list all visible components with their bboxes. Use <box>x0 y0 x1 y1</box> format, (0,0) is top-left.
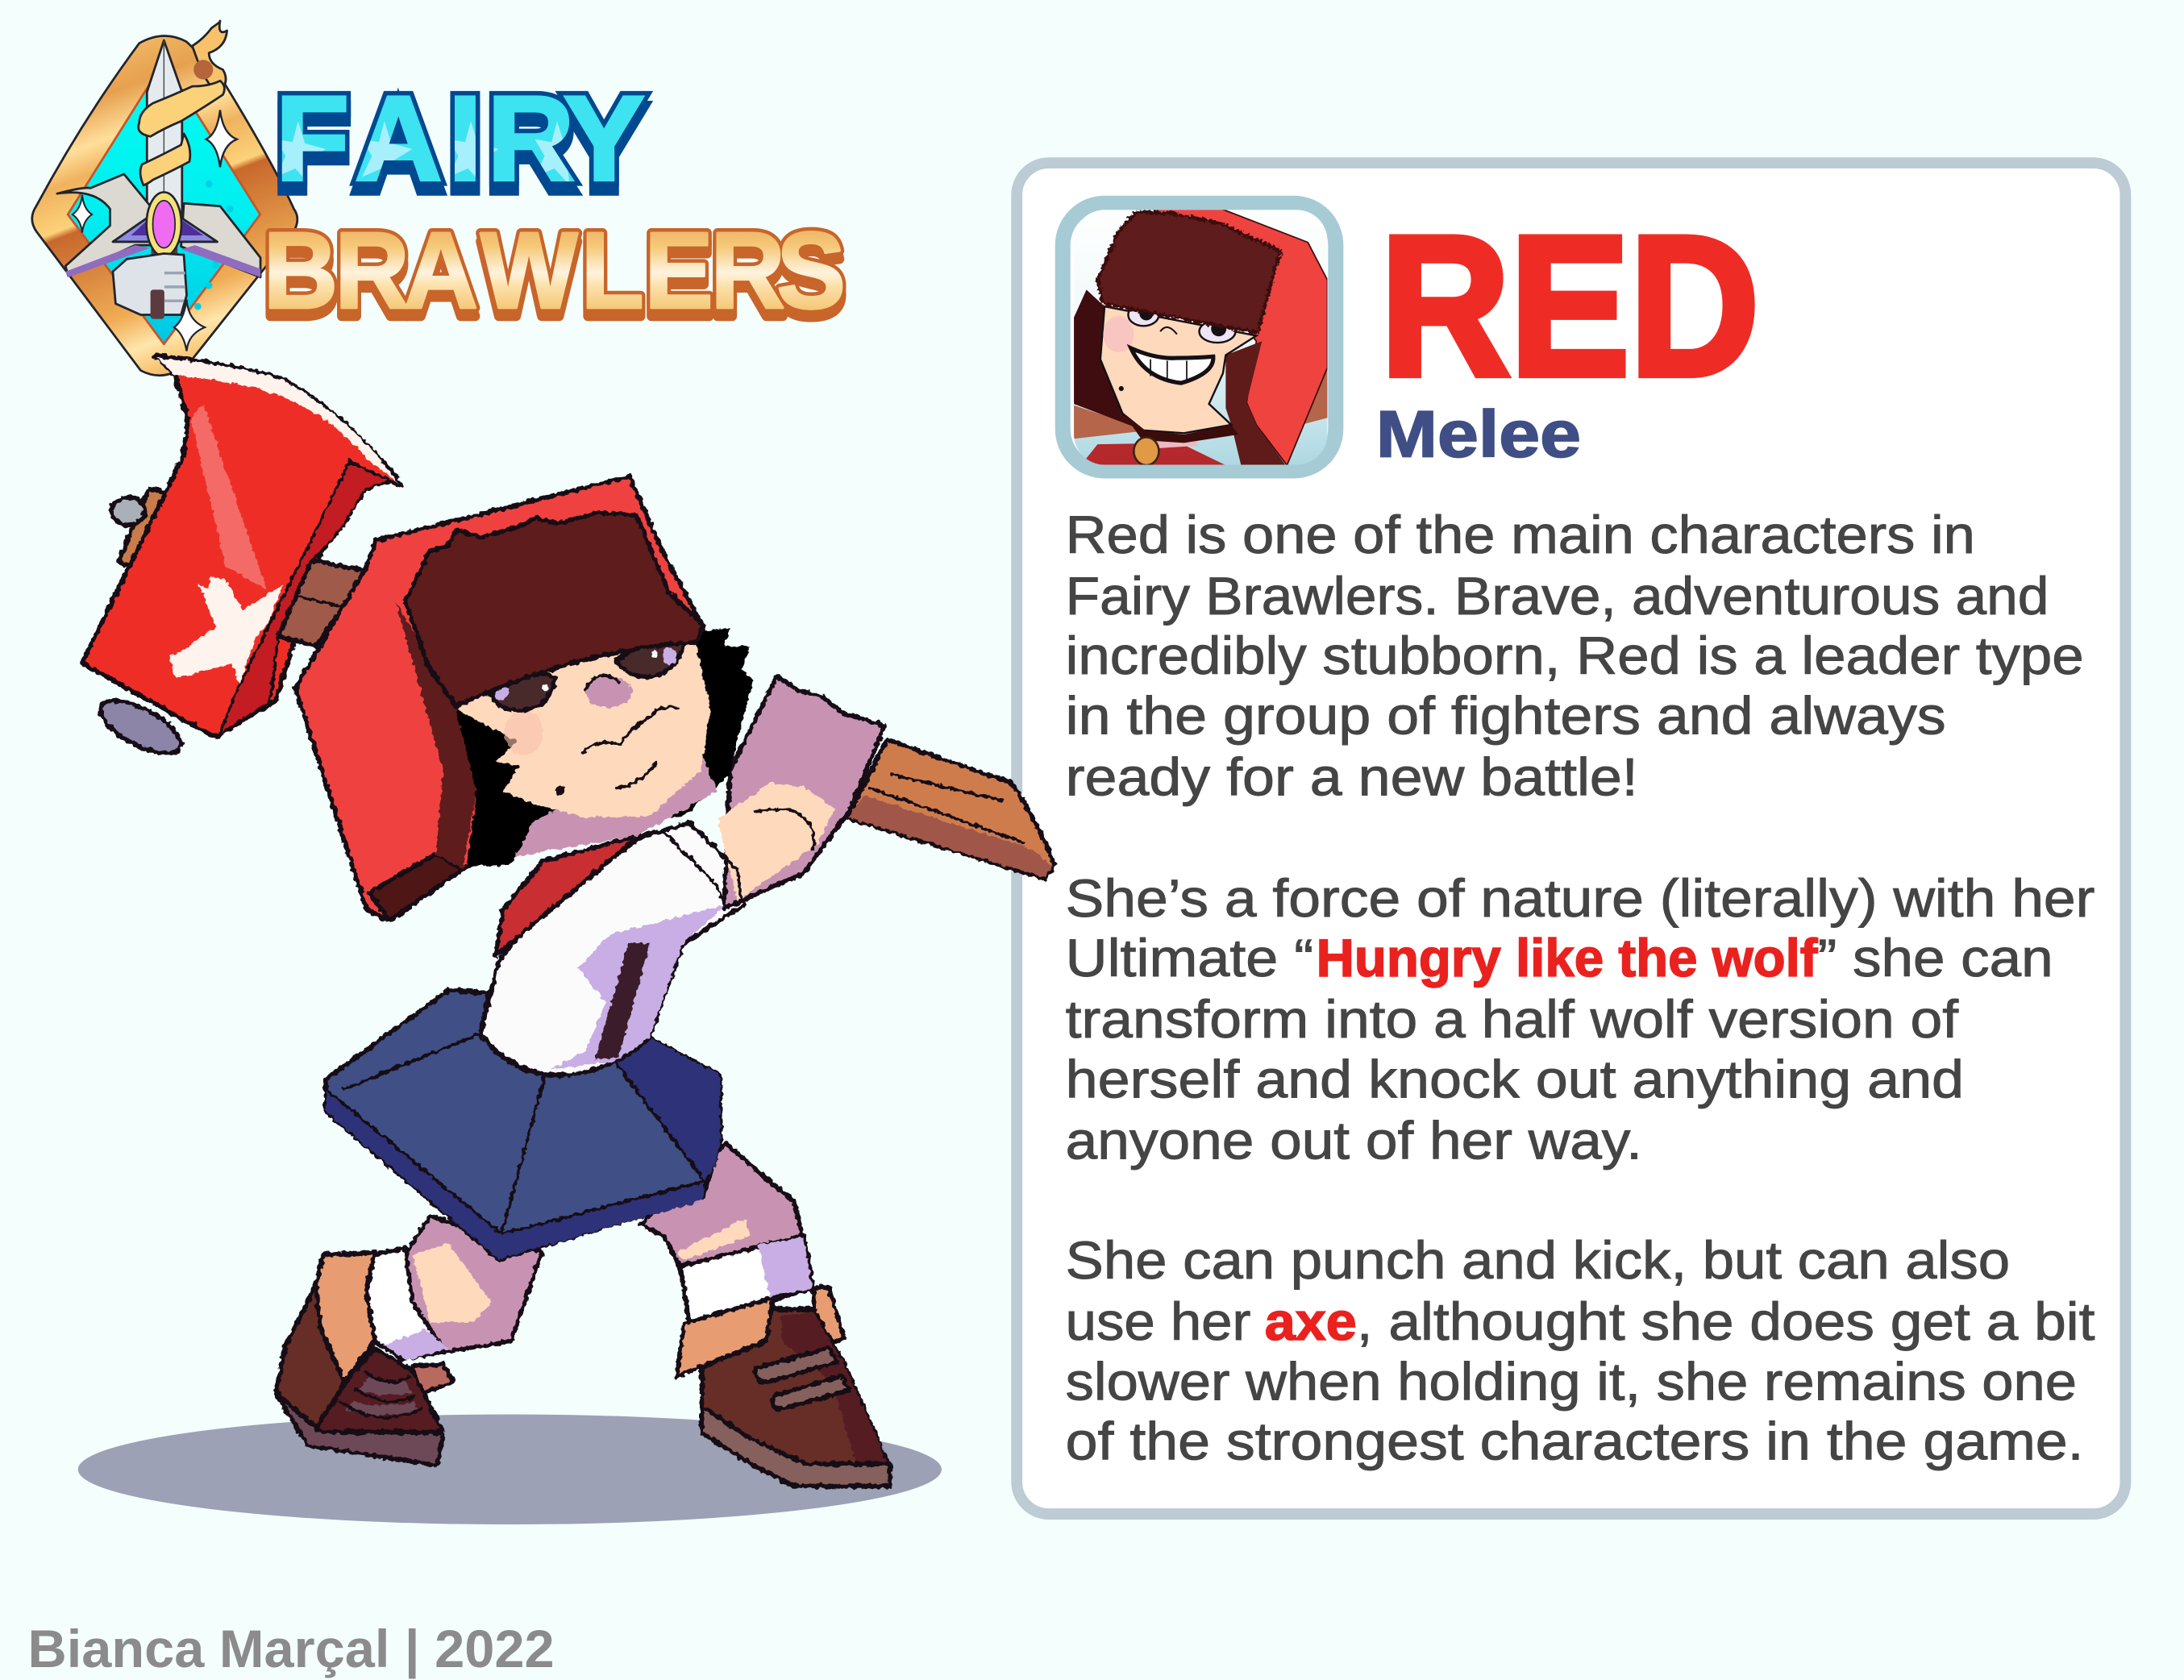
logo word: FAIRY: FAIRY <box>276 81 644 215</box>
face <box>456 634 710 817</box>
logo word: BRAWLERS: BRAWLERS <box>264 210 846 331</box>
character ground shadow <box>78 1415 942 1524</box>
info panel <box>1017 163 2125 1514</box>
paragraph 2 <box>1066 869 2095 1170</box>
paragraph 2: Ultimate “ <box>1066 929 1313 988</box>
paragraph 1: incredibly stubborn, Red is a leader type <box>1066 626 2084 685</box>
mole <box>555 787 564 796</box>
logo word: FAIRY: FAIRY <box>276 72 644 206</box>
logo word: BRAWLERS: BRAWLERS <box>264 210 846 331</box>
eyes <box>490 675 555 710</box>
right leg and shoe <box>641 1143 890 1486</box>
paragraph 3: axe <box>1265 1292 1357 1351</box>
gloved hand <box>113 253 187 314</box>
torso and collar <box>480 823 744 1075</box>
character class: Melee <box>1376 398 1581 472</box>
head with hood and face <box>295 476 754 921</box>
paragraph 1: Fairy Brawlers. Brave, adventurous and <box>1066 567 2049 626</box>
paragraph 1 <box>1066 505 2084 807</box>
paragraph 2: anyone out of her way. <box>1066 1111 1642 1170</box>
fur hat <box>406 513 703 706</box>
panel frame <box>1017 163 2125 1514</box>
paragraph 1: Red is one of the main characters in <box>1066 505 1975 564</box>
paragraph 3 <box>1066 1231 2095 1471</box>
left leg and shoe <box>276 1216 542 1466</box>
paragraph 3: use her <box>1066 1292 1250 1351</box>
paragraph 2: She’s a force of nature (literally) with her <box>1066 869 2095 928</box>
sparkles <box>206 110 237 167</box>
mouth <box>582 707 677 754</box>
hood <box>295 476 703 921</box>
neck <box>515 752 718 857</box>
hair <box>456 628 754 867</box>
ribbon around sword <box>139 81 224 136</box>
axe <box>82 356 402 764</box>
skirt <box>326 990 720 1259</box>
paragraph 3: of the strongest characters in the game. <box>1066 1412 2084 1471</box>
logo word: BRAWLERS: BRAWLERS <box>264 218 846 339</box>
paragraph 3: slower when holding it, she remains one <box>1066 1352 2077 1411</box>
arm and sleeve <box>663 676 884 908</box>
artist credit: Bianca Marçal | 2022 <box>28 1620 555 1679</box>
paragraph 2: transform into a half wolf version of <box>1066 990 1959 1049</box>
paragraph 1: in the group of fighters and always <box>1066 687 1946 746</box>
logo emblem <box>32 21 297 376</box>
character name: RED <box>1380 195 1759 418</box>
logo: Fairy Brawlers <box>32 21 846 376</box>
paragraph 2: ” she can <box>1818 929 2053 988</box>
portrait of Red <box>1063 203 1336 471</box>
open book <box>57 174 151 276</box>
nose <box>585 677 632 708</box>
paragraph 1: ready for a new battle! <box>1066 748 1638 807</box>
paragraph 3: , althought she does get a bit <box>1357 1292 2095 1351</box>
paragraph 2: Hungry like the wolf <box>1317 929 1818 988</box>
logo word: FAIRY: FAIRY <box>276 72 644 206</box>
paragraph 2: herself and knock out anything and <box>1066 1050 1964 1108</box>
character illustration: Red swinging axe <box>82 356 1055 1486</box>
axe handle behind the hand <box>847 739 1055 879</box>
paragraph 3: She can punch and kick, but can also <box>1066 1231 2010 1290</box>
